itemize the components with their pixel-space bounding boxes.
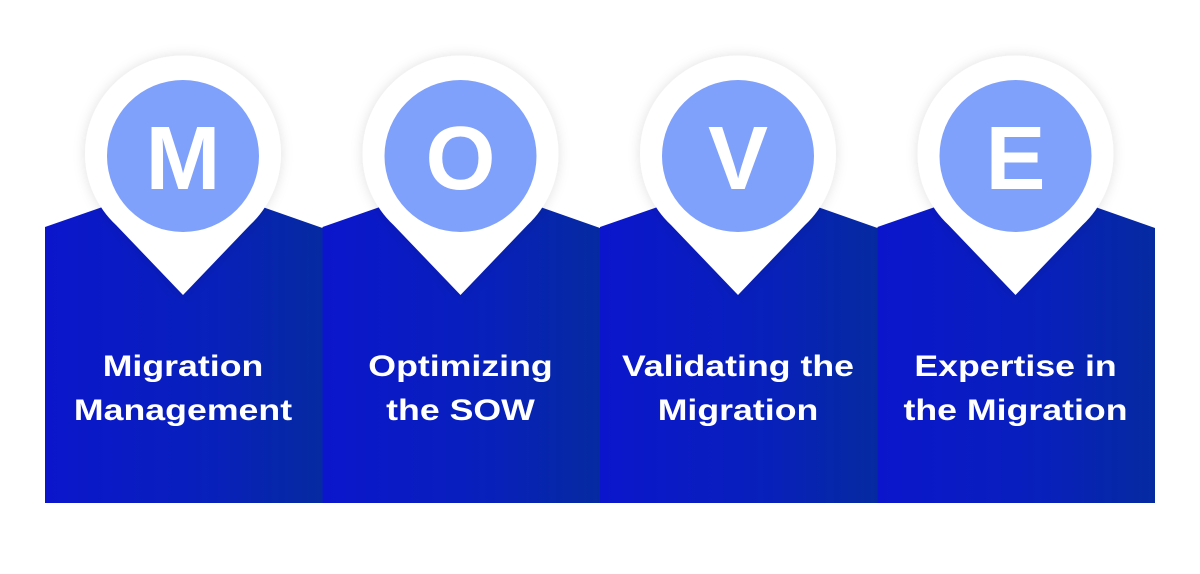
pin: O: O bbox=[425, 109, 496, 209]
label: Validating the Migration: Validating the bbox=[622, 349, 854, 382]
label: Validating the Migration: Migration bbox=[658, 393, 818, 426]
pin: M: M bbox=[146, 109, 220, 209]
pin: V: V bbox=[708, 109, 768, 209]
panel: O bbox=[322, 55, 600, 503]
pin: E: E bbox=[985, 109, 1046, 209]
label: Optimizing the SOW: the SOW bbox=[386, 393, 536, 426]
pin: O bbox=[362, 55, 558, 295]
label: Expertise in the Migration: the Migration bbox=[903, 393, 1128, 426]
panel: V bbox=[600, 55, 878, 503]
panel: E bbox=[878, 55, 1155, 503]
pin: V bbox=[640, 55, 836, 295]
pin: E bbox=[918, 55, 1114, 295]
pin: M bbox=[85, 55, 281, 295]
label: Migration Management: Migration bbox=[103, 349, 263, 382]
label: Expertise in the Migration: Expertise in bbox=[914, 349, 1117, 382]
label: Optimizing the SOW: Optimizing bbox=[368, 349, 553, 382]
label: Migration Management: Management bbox=[74, 393, 292, 426]
panel: M bbox=[45, 55, 322, 503]
